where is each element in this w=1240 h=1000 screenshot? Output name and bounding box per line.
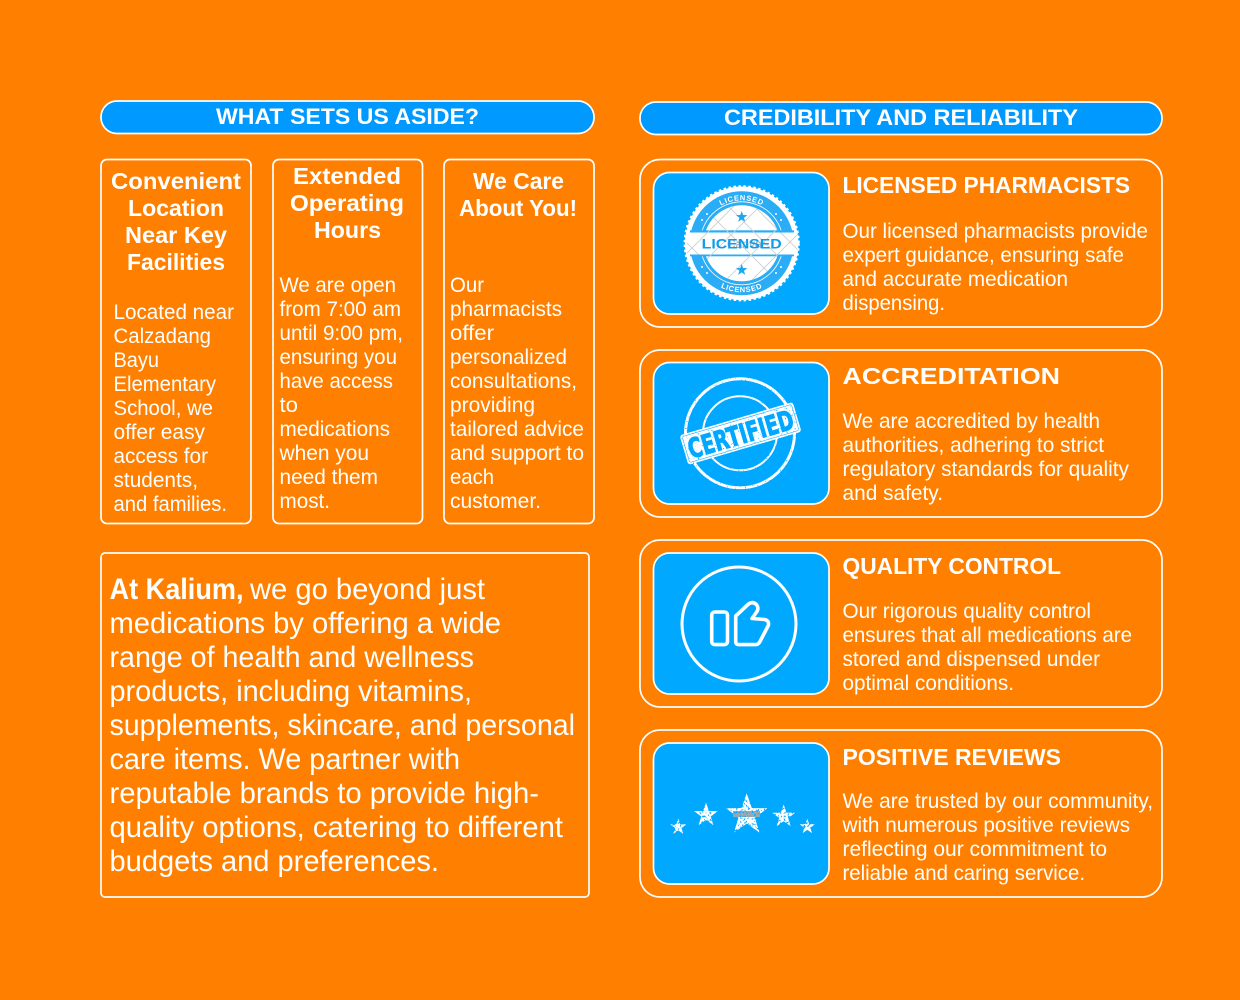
text: convenient location description: Bayu [114,349,159,372]
icon: licensed seal: LICENSED [702,235,782,251]
text: licensed pharmacists description: dispensing. [842,292,945,315]
text: convenient location description: Elementary [114,373,216,396]
text: convenient location description: Located near [114,301,234,324]
icon: licensed seal: Canva [727,237,762,251]
text: positive reviews description [842,790,1153,885]
text: licensed pharmacists description: expert guidance, ensuring safe [842,244,1124,267]
icon: certified stamp: CERTIFIED [684,405,798,465]
text: we care description: Our [450,274,484,297]
text: accreditation description: regulatory standards for quality [842,458,1129,481]
text: positive reviews description: with numerous positive reviews [842,814,1130,837]
text: operating hours description: most. [280,490,330,513]
text: operating hours description: need them [280,466,378,489]
heading: we care about you [459,168,577,221]
card: quality control [640,540,1162,707]
text: about Kalium paragraph: care items. We partner with [110,743,460,776]
text: quality control description: Our rigorous quality control [842,600,1091,623]
text: convenient location description: students, [114,469,198,492]
text: operating hours description: until 9:00 pm, [280,322,403,345]
heading: convenient location: Location [128,195,224,221]
text: operating hours description: We are open [280,274,396,297]
panel: convenient location [101,160,251,524]
heading: extended operating hours: Extended [293,163,401,189]
heading: quality control: QUALITY CONTROL [842,553,1061,579]
heading: accreditation: ACCREDITATION [842,363,1060,389]
panel: about Kalium [101,553,589,897]
card: accreditation [640,350,1162,517]
text: positive reviews description: reflecting our commitment to [842,838,1107,861]
text: about Kalium paragraph: At Kalium, [110,573,244,606]
text: operating hours description: medications [280,418,390,441]
text: licensed pharmacists description [842,220,1148,315]
text: convenient location description: and families. [114,493,227,516]
text: convenient location description: Calzadang [114,325,211,348]
text: operating hours description [279,274,403,513]
card: positive reviews [640,730,1162,897]
text: about Kalium paragraph [110,573,575,878]
right column header: credibility and reliability [640,102,1162,134]
text: we care description: pharmacists [450,298,562,321]
text: about Kalium paragraph: quality options, catering to different [110,811,564,844]
heading: we care about you: We Care [473,168,564,194]
heading: convenient location: Near Key [125,222,227,248]
heading: we care about you: About You! [459,195,577,221]
text: positive reviews description: reliable and caring service. [842,862,1085,885]
left column header: What sets us aside [101,101,594,134]
text: operating hours description: have access [280,370,393,393]
text: about Kalium paragraph: supplements, skincare, and personal [110,709,575,742]
heading: extended operating hours: Hours [314,217,381,243]
text: quality control description [842,600,1132,695]
text: we care description [450,274,584,513]
text: accreditation description: authorities, adhering to strict [842,434,1104,457]
text: about Kalium paragraph: medications by offering a wide [110,607,501,640]
text: quality control description: stored and dispensed under [842,648,1100,671]
text: positive reviews description: We are trusted by our community, [842,790,1153,813]
text: we care description: consultations, [450,370,577,393]
text: about Kalium paragraph: reputable brands to provide high- [110,777,539,810]
text: operating hours description: from 7:00 am [280,298,401,321]
text: licensed pharmacists description: and accurate medication [842,268,1068,291]
text: about Kalium paragraph: budgets and preferences. [110,845,439,878]
text: convenient location description: School, we [114,397,213,420]
heading: extended operating hours: Operating [290,190,404,216]
text: convenient location description [114,301,234,516]
text: operating hours description: ensuring you [280,346,397,369]
text: quality control description: ensures that all medications are [842,624,1132,647]
text: we care description: providing [450,394,535,417]
text: operating hours description: to [280,394,298,417]
card: licensed pharmacists [639,158,1163,328]
panel: extended operating hours [273,160,422,524]
icon: licensed seal [684,185,800,302]
icon: licensed seal: LICENSED [719,195,763,206]
panel: we care about you [444,160,594,524]
heading: convenient location: Convenient [111,168,241,194]
text: we care description: customer. [450,490,541,513]
text: we care description: and support to [450,442,584,465]
text: we care description: each [450,466,494,489]
heading: positive reviews: POSITIVE REVIEWS [842,744,1061,770]
text: accreditation description: We are accredited by health [842,410,1100,433]
text: about Kalium paragraph: range of health and wellness [110,641,474,674]
heading: licensed pharmacists: LICENSED PHARMACISTS [842,172,1130,198]
icon: licensed seal: LICENSED [721,282,762,292]
text: convenient location description: offer easy [114,421,205,444]
text: quality control description: optimal conditions. [842,672,1014,695]
heading: convenient location: Facilities [127,249,225,275]
text: we care description: personalized [450,346,567,369]
icon: certified stamp [680,379,802,488]
text: accreditation description [842,410,1129,505]
text: licensed pharmacists description: Our licensed pharmacists provide [842,220,1148,243]
text: accreditation description: and safety. [842,482,943,505]
right column header: credibility and reliability: CREDIBILITY AND RELIABILITY [724,105,1078,130]
text: we care description: offer [450,322,494,345]
text: about Kalium paragraph: we go beyond just [249,573,486,606]
icon: thumbs up [682,567,796,681]
heading: convenient location [111,168,241,275]
text: we care description: tailored advice [450,418,584,441]
left column header: What sets us aside: WHAT SETS US ASIDE? [216,104,479,129]
text: convenient location description: access for [114,445,208,468]
icon: five stars [670,793,815,834]
heading: extended operating hours [290,163,404,243]
text: operating hours description: when you [279,442,369,465]
text: about Kalium paragraph: products, including vitamins, [110,675,472,708]
